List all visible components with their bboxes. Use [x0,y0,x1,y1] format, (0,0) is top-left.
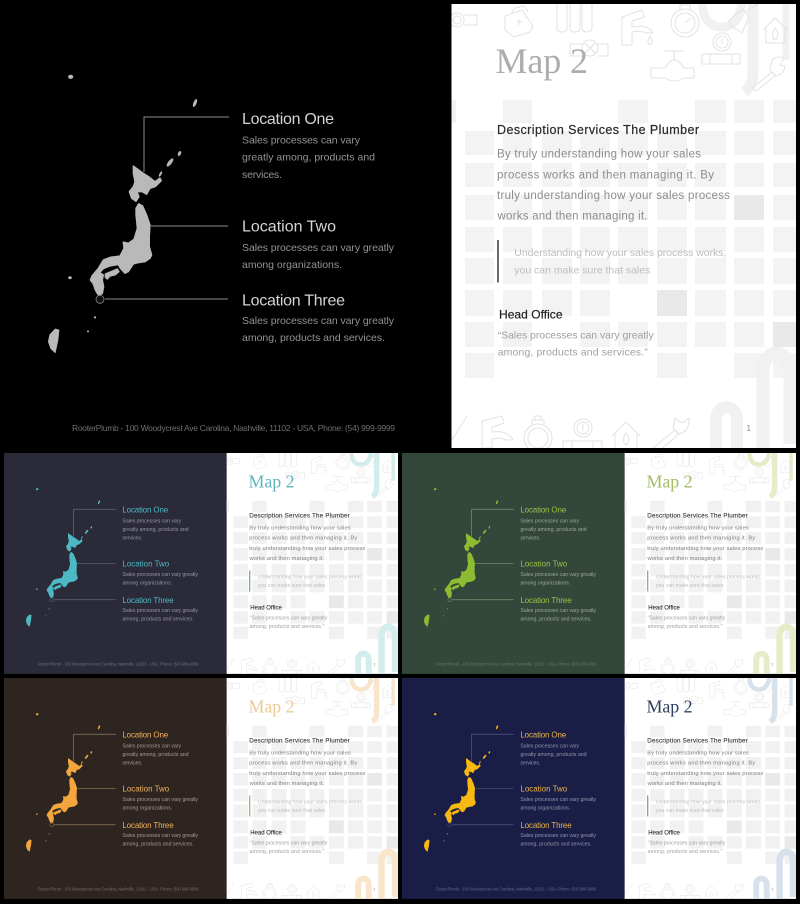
background icons and pipes [226,453,398,676]
slide: orange variant [4,678,398,901]
quote: you can make sure that sales [258,808,326,814]
leader lines [54,509,116,600]
page background [625,678,796,899]
quote: you can make sure that sales [656,808,724,814]
location two: Location Two [520,559,568,568]
leader lines [452,509,514,600]
head office text: among, products and services.” [250,849,324,855]
description heading: Description Services The Plumber [497,123,699,137]
location one [520,506,587,542]
map of Japan [424,488,499,626]
left panel: brown map panel [4,678,227,899]
page number: 1 [373,886,376,891]
location two: Sales processes can vary greatly [520,572,596,578]
location two [520,784,596,811]
title: Map 2 [249,471,295,491]
location one: greatly among, products and [520,527,587,533]
page number: 1 [373,661,376,666]
background icons and pipes [450,4,796,452]
footer address: RooterPlumb - 100 Woodycrest Ave Carolina, Nashville, 11102 - USA, Phone: (54) 999-9999 [38,886,199,891]
location three [520,821,596,848]
location three: Location Three [520,821,572,830]
location three: Location Three [242,293,345,310]
quote: Understanding how your sales process works, [656,574,761,580]
location three: Sales processes can vary greatly [242,315,395,327]
location three [122,821,198,848]
head office text: “Sales processes can vary greatly [498,330,654,342]
location one: Sales processes can vary [520,743,580,749]
description body: truly understanding how your sales process [249,771,365,777]
location one [520,731,587,767]
description body: process works and then managing it. By [497,169,714,181]
background icons and pipes [226,678,398,901]
description body [249,525,365,562]
description heading: Description Services The Plumber [647,513,748,520]
description body: By truly understanding how your sales [249,750,351,756]
quote [656,574,761,589]
location three: Sales processes can vary greatly [122,833,198,839]
title: Map 2 [249,696,295,716]
description body: works and then managing it. [647,556,723,562]
location two: Location Two [122,784,170,793]
quote: Understanding how your sales process works, [258,799,363,805]
page number: 1 [771,661,774,666]
head office text: among, products and services.” [648,624,722,630]
head office text: among, products and services.” [648,849,722,855]
description heading: Description Services The Plumber [647,738,748,745]
description body: truly understanding how your sales process [497,190,730,202]
footer address: RooterPlumb - 100 Woodycrest Ave Carolina, Nashville, 11102 - USA, Phone: (54) 999-9999 [436,886,597,891]
leader lines [54,734,116,825]
description body: process works and then managing it. By [249,536,357,542]
location two: Sales processes can vary greatly [122,797,198,803]
location three [242,293,395,344]
slide: monochrome main [4,4,796,452]
right panel: white description page [226,678,398,901]
location two [122,559,198,586]
footer address: RooterPlumb - 100 Woodycrest Ave Carolina, Nashville, 11102 - USA, Phone: (54) 999-9999 [72,423,395,433]
leader lines [105,117,229,299]
head office text: “Sales processes can vary greatly [648,841,726,847]
location one [122,506,189,542]
description body: works and then managing it. [496,210,648,222]
description body [249,750,365,787]
description body: works and then managing it. [647,781,723,787]
location one: Location One [520,506,567,515]
location one: greatly among, products and [122,527,189,533]
slide: teal variant [4,453,398,676]
location two [242,219,395,271]
description body: process works and then managing it. By [647,761,755,767]
location three [122,596,198,623]
location one: services. [520,536,540,542]
quote bar [646,795,649,817]
location three: among, products and services. [520,617,592,623]
location three: among, products and services. [122,842,194,848]
location one: greatly among, products and [520,752,587,758]
location one: services. [520,761,540,767]
description heading: Description Services The Plumber [249,513,350,520]
head office text [648,841,726,855]
right panel: white description page [450,4,796,452]
leader lines [452,734,514,825]
location one: Location One [122,506,169,515]
location three: among, products and services. [122,617,194,623]
location two: among organizations. [520,805,570,811]
background icons and pipes [624,678,796,901]
location one: Sales processes can vary [242,134,361,146]
location one: greatly among, products and [122,752,189,758]
location two: Location Two [242,219,336,236]
right panel: white description page [624,453,796,676]
footer address: RooterPlumb - 100 Woodycrest Ave Carolina, Nashville, 11102 - USA, Phone: (54) 999-9999 [436,661,597,666]
description body: By truly understanding how your sales [249,525,351,531]
quote: Understanding how your sales process works, [656,799,761,805]
description body [647,750,763,787]
location one: services. [122,761,142,767]
right panel: white description page [624,678,796,901]
head office text: “Sales processes can vary greatly [250,616,328,622]
page background [625,453,796,674]
panel background [4,453,227,674]
location two: Sales processes can vary greatly [122,572,198,578]
description body: By truly understanding how your sales [497,149,701,161]
title: Map 2 [496,41,588,81]
location one: services. [242,169,282,181]
location one: Sales processes can vary [122,518,182,524]
location one: greatly among, products and [242,152,375,164]
location two [520,559,596,586]
location one: Location One [122,731,169,740]
location three: Location Three [122,596,174,605]
location three: among, products and services. [242,332,385,344]
quote: Understanding how your sales process works, [258,574,363,580]
map of Japan [26,488,101,626]
description heading: Description Services The Plumber [249,738,350,745]
location one: Location One [242,111,334,128]
background icons and pipes [624,453,796,676]
location one [242,111,375,181]
footer address: RooterPlumb - 100 Woodycrest Ave Carolina, Nashville, 11102 - USA, Phone: (54) 999-9999 [38,661,199,666]
left panel: green map panel [402,453,625,674]
left panel: teal map panel [4,453,227,674]
head office heading: Head Office [250,605,283,611]
location one: Sales processes can vary [520,518,580,524]
head office text: among, products and services.” [498,347,648,359]
location three: Location Three [122,821,174,830]
quote bar [248,570,251,592]
left panel: navy map panel [402,678,625,899]
head office text [498,330,654,359]
description body: By truly understanding how your sales [647,525,749,531]
map of Japan [26,713,101,851]
title: Map 2 [647,471,693,491]
location two: Sales processes can vary greatly [520,797,596,803]
page background [452,4,796,448]
description body: process works and then managing it. By [647,536,755,542]
head office text: “Sales processes can vary greatly [250,841,328,847]
quote [514,247,726,276]
location two: among organizations. [242,259,342,271]
page number: 1 [746,424,752,433]
quote [656,799,761,814]
location two: Location Two [122,559,170,568]
description body: truly understanding how your sales process [647,771,763,777]
description body: works and then managing it. [249,781,325,787]
map of Japan [49,75,198,352]
page background [227,453,398,674]
head office heading: Head Office [648,605,681,611]
slide: green variant [402,453,796,676]
description body: truly understanding how your sales process [647,546,763,552]
title: Map 2 [647,696,693,716]
head office text [250,616,328,630]
right panel: white description page [226,453,398,676]
map of Japan [424,713,499,851]
head office text: among, products and services.” [250,624,324,630]
head office heading: Head Office [250,830,283,836]
quote: Understanding how your sales process works, [514,247,726,259]
quote: you can make sure that sales [656,583,724,589]
location three: Sales processes can vary greatly [520,833,596,839]
location two: among organizations. [520,580,570,586]
slide: navy variant [402,678,796,901]
location two: Sales processes can vary greatly [242,242,395,254]
location three: Location Three [520,596,572,605]
location two [122,784,198,811]
description body [647,525,763,562]
location two: Location Two [520,784,568,793]
quote: you can make sure that sales [514,264,650,276]
description body [496,149,730,222]
location one: Sales processes can vary [122,743,182,749]
quote [258,574,363,589]
location three: Sales processes can vary greatly [520,608,596,614]
quote bar [497,240,499,282]
panel background [402,678,625,899]
location two: among organizations. [122,805,172,811]
location two: among organizations. [122,580,172,586]
page number: 1 [771,886,774,891]
location one: Location One [520,731,567,740]
panel background [402,453,625,674]
head office text [250,841,328,855]
quote [258,799,363,814]
quote bar [646,570,649,592]
location one [122,731,189,767]
head office heading: Head Office [648,830,681,836]
panel background [4,4,452,448]
description body: By truly understanding how your sales [647,750,749,756]
head office heading: Head Office [499,307,563,321]
page background [227,678,398,899]
quote bar [248,795,251,817]
location three: among, products and services. [520,842,592,848]
head office text [648,616,726,630]
left panel: black map panel [4,4,452,448]
head office text: “Sales processes can vary greatly [648,616,726,622]
panel background [4,678,227,899]
description body: process works and then managing it. By [249,761,357,767]
location one: services. [122,536,142,542]
location three [520,596,596,623]
location three: Sales processes can vary greatly [122,608,198,614]
quote: you can make sure that sales [258,583,326,589]
description body: works and then managing it. [249,556,325,562]
description body: truly understanding how your sales process [249,546,365,552]
